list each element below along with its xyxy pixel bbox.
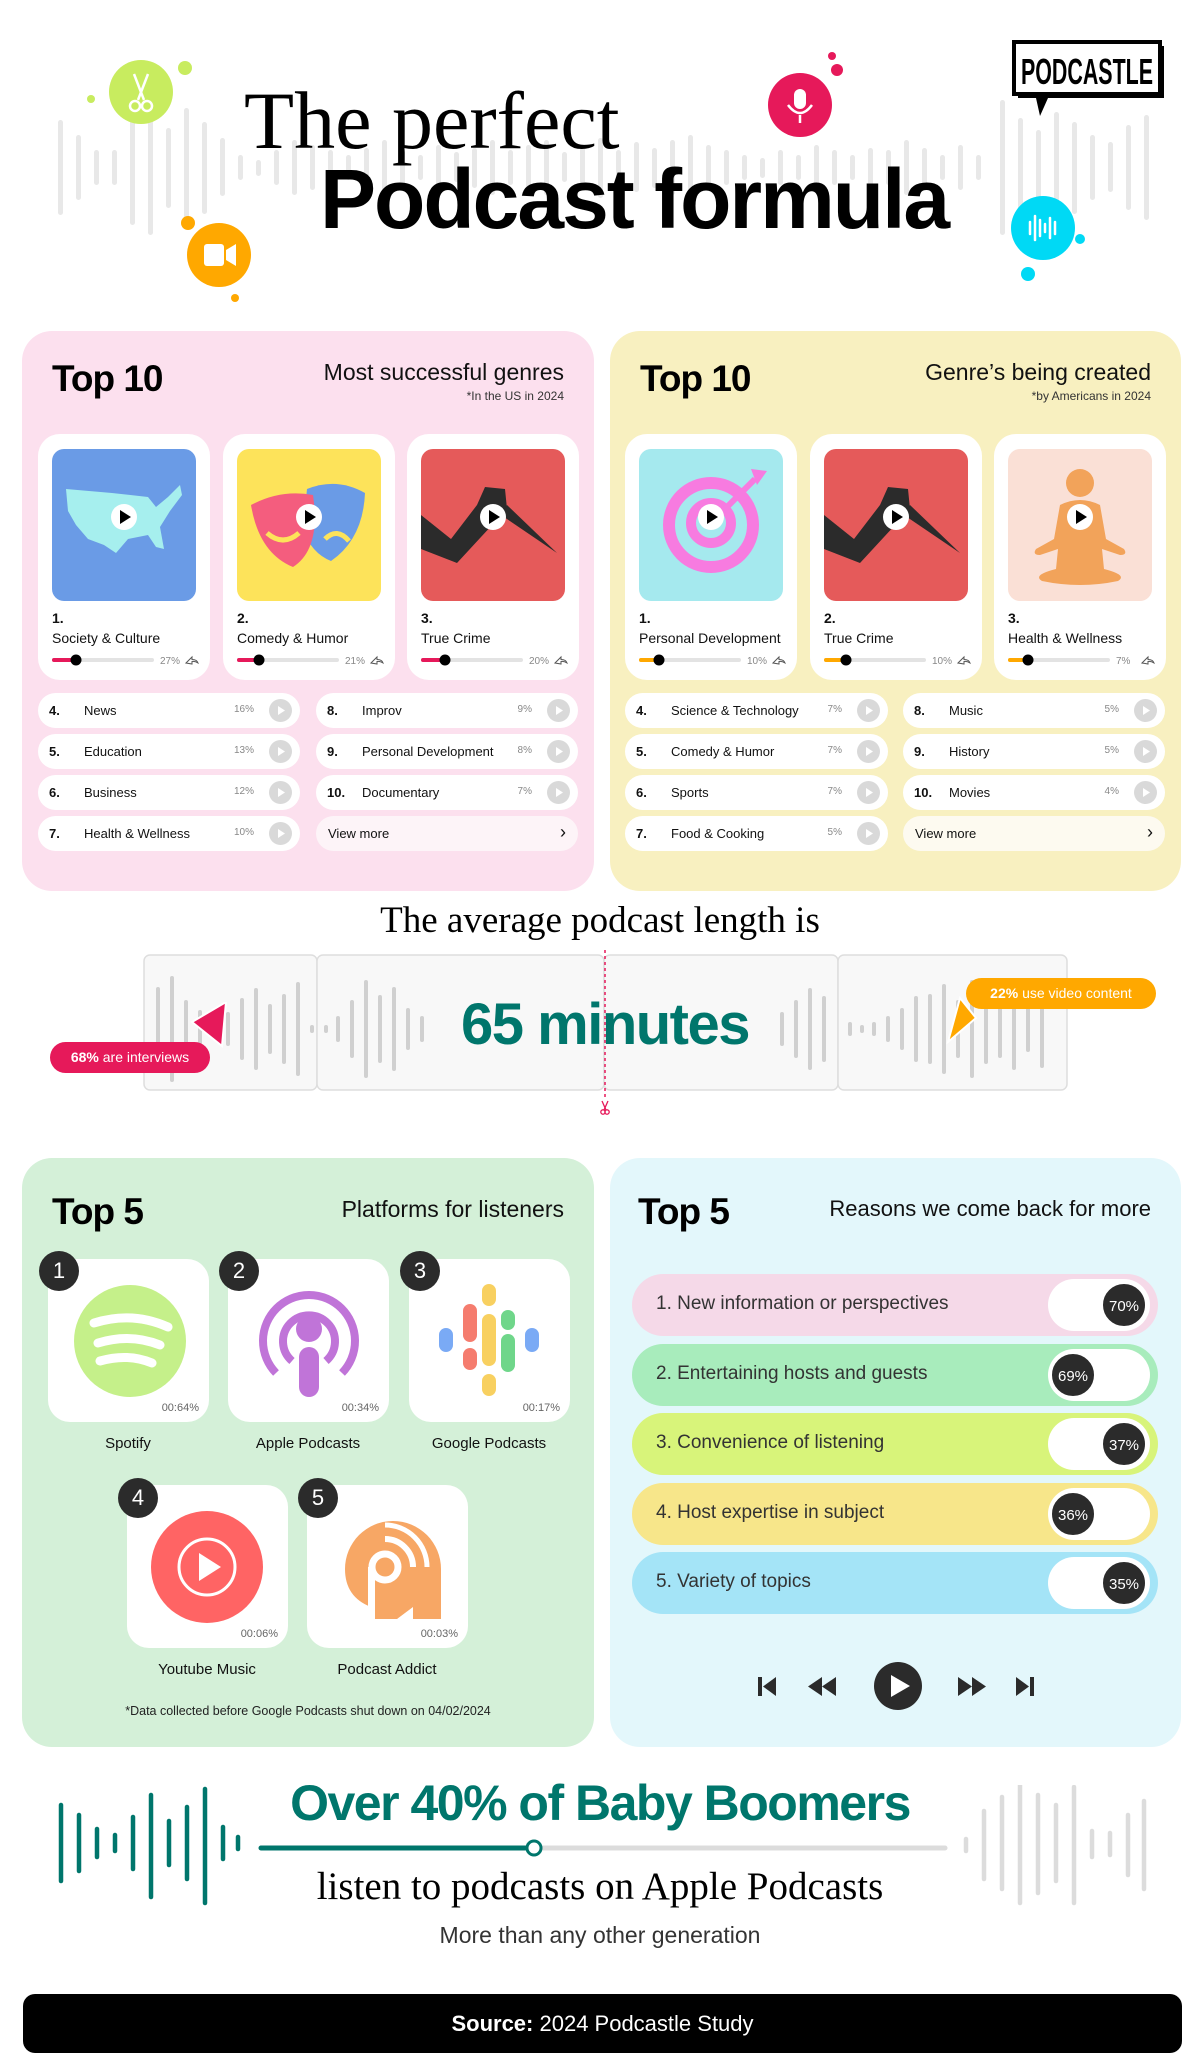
list: genres 4-10 (successful): 4. <box>49 703 60 718</box>
card: true crime (created): 2. <box>824 610 836 626</box>
list: genres 4-10 (successful): 5. <box>49 744 60 759</box>
list: genres 4-10 (successful): Personal Development <box>362 744 494 759</box>
list: genres 4-10 (successful): 12% <box>234 786 254 797</box>
card: personal development <box>625 434 797 680</box>
logo: PODCASTLE <box>1012 40 1164 116</box>
list: genres 4-10 (created): 7% <box>828 786 842 797</box>
bar: reason 5 <box>632 1552 1158 1614</box>
badge 2: 2 <box>233 1258 245 1283</box>
platform: Youtube Music <box>127 1485 288 1648</box>
chart: waveform timeline <box>143 950 1068 1115</box>
callout: 22% video: 22% use video content <box>990 985 1132 1001</box>
list: genres 4-10 (successful): 8. <box>327 703 338 718</box>
title: The perfect <box>244 75 620 166</box>
title: Podcast formula <box>320 152 948 246</box>
list: genres 4-10 (successful): 10. <box>327 785 345 800</box>
platform: Spotify <box>48 1259 209 1422</box>
list: genres 4-10 (successful): 7. <box>49 826 60 841</box>
heading: average podcast length: The average podcast length is <box>380 900 820 941</box>
list: genres 4-10 (successful): News <box>84 703 117 718</box>
card: comedy & humor <box>223 434 395 680</box>
list: genres 4-10 (successful): View more <box>328 826 389 841</box>
heading: Over 40% of Baby Boomers: Over 40% of Baby Boomers <box>290 1775 910 1831</box>
card: true crime: 3. <box>421 610 433 626</box>
badge 4: 4 <box>132 1485 144 1510</box>
bar: reason 2: 69% <box>1058 1368 1088 1385</box>
subtitle: Reasons we come back for more <box>829 1196 1151 1221</box>
bar: reason 1: 70% <box>1109 1298 1139 1315</box>
list: genres 4-10 (successful) <box>38 693 578 851</box>
card: true crime (created): True Crime <box>824 630 894 646</box>
callout: 22% video <box>950 978 1156 1039</box>
card: society & culture <box>38 434 210 680</box>
badge 5: 5 <box>312 1485 324 1510</box>
subtitle: Genre’s being created <box>925 359 1151 385</box>
heading: Top 5: Top 5 <box>52 1191 143 1232</box>
label: Youtube Music: Youtube Music <box>158 1661 256 1678</box>
list: genres 4-10 (created): Music <box>949 703 983 718</box>
icon: knife <box>824 449 968 601</box>
badge 3 <box>400 1251 440 1291</box>
bar: reason 5: 5. Variety of topics <box>656 1571 811 1592</box>
list: genres 4-10 (created): 9. <box>914 744 925 759</box>
list: genres 4-10 (successful): 7% <box>518 786 532 797</box>
footnote: *Data collected before Google Podcasts shut down on 04/02/2024 <box>125 1704 491 1718</box>
card: health & wellness <box>994 434 1166 680</box>
list: genres 4-10 (created): Comedy & Humor <box>671 744 774 759</box>
text: listen to podcasts on Apple Podcasts: listen to podcasts on Apple Podcasts <box>317 1865 883 1908</box>
list: genres 4-10 (created): 8. <box>914 703 925 718</box>
list: genres 4-10 (created): 5% <box>1105 704 1119 715</box>
icon: USA map <box>52 449 196 601</box>
icon: teal waveform <box>58 1786 240 1906</box>
list: genres 4-10 (created): Science & Technology <box>671 703 799 718</box>
platform: Google Podcasts <box>409 1259 570 1422</box>
icon: target <box>639 449 783 601</box>
list: genres 4-10 (successful): 8% <box>518 745 532 756</box>
heading: Top 5: Top 5 <box>638 1191 729 1232</box>
bar: reason 1 <box>632 1274 1158 1336</box>
platform: Podcast Addict: 00:03% <box>421 1628 458 1640</box>
icon: audio waveform bubble <box>1011 196 1085 281</box>
list: genres 4-10 (successful): 13% <box>234 745 254 756</box>
header waveform background <box>58 100 1149 235</box>
icon: apple podcasts <box>259 1291 359 1397</box>
label: Apple Podcasts: Apple Podcasts <box>256 1435 360 1452</box>
bar: reason 4: 4. Host expertise in subject <box>656 1502 884 1523</box>
platform: Google Podcasts: 00:17% <box>523 1402 560 1414</box>
icon: meditation <box>1008 449 1152 601</box>
list: genres 4-10 (created): 5% <box>1105 745 1119 756</box>
platform: Apple Podcasts <box>228 1259 389 1422</box>
card: health & wellness: 3. <box>1008 610 1020 626</box>
list: genres 4-10 (created): 4. <box>636 703 647 718</box>
list: genres 4-10 (created) <box>625 693 1165 851</box>
list: genres 4-10 (successful): Health & Wellness <box>84 826 190 841</box>
slider <box>258 1840 948 1856</box>
card: health & wellness: Health & Wellness <box>1008 630 1122 646</box>
label: Google Podcasts: Google Podcasts <box>432 1435 546 1452</box>
icon: youtube music <box>151 1511 263 1623</box>
list: genres 4-10 (created): History <box>949 744 989 759</box>
list: genres 4-10 (created): 4% <box>1105 786 1119 797</box>
bar: reason 5: 35% <box>1109 1576 1139 1593</box>
list: genres 4-10 (created): Movies <box>949 785 990 800</box>
icon: knife <box>421 449 565 601</box>
card: comedy & humor: 2. <box>237 610 249 626</box>
caption: *by Americans in 2024 <box>1032 389 1151 403</box>
list: genres 4-10 (created): 7% <box>828 704 842 715</box>
list: genres 4-10 (created): 7% <box>828 745 842 756</box>
callout: 68% interviews: 68% are interviews <box>71 1049 189 1065</box>
platform: Podcast Addict <box>307 1485 468 1648</box>
list: genres 4-10 (created): 5% <box>828 827 842 838</box>
bar: reason 2 <box>632 1344 1158 1406</box>
label: Podcast Addict: Podcast Addict <box>337 1661 437 1678</box>
list: genres 4-10 (created): View more <box>915 826 976 841</box>
list: genres 4-10 (successful): 10% <box>234 827 254 838</box>
list: genres 4-10 (successful): Documentary <box>362 785 439 800</box>
list: genres 4-10 (created): 7. <box>636 826 647 841</box>
list: genres 4-10 (created): 10. <box>914 785 932 800</box>
list: genres 4-10 (successful): 9% <box>518 704 532 715</box>
card: true crime: True Crime <box>421 630 490 646</box>
caption: *In the US in 2024 <box>467 389 564 403</box>
card: personal development: Personal Development <box>639 630 781 646</box>
icon: theatre masks <box>237 449 381 601</box>
footer: source: Source: 2024 Podcastle Study <box>451 2011 754 2036</box>
label: Spotify: Spotify <box>105 1435 151 1452</box>
list: genres 4-10 (created): Sports <box>671 785 709 800</box>
badge 5 <box>298 1478 338 1518</box>
icon: microphone bubble <box>768 52 843 137</box>
heading: Top 10: Top 10 <box>52 358 162 399</box>
badge 2 <box>219 1251 259 1291</box>
panel: most successful genres <box>22 331 594 891</box>
bar: reason 1: 1. New information or perspectives <box>656 1293 949 1314</box>
stat: 65 minutes: 65 minutes <box>461 992 749 1057</box>
card: comedy & humor: Comedy & Humor <box>237 630 348 646</box>
icon: spotify <box>74 1285 186 1397</box>
list: genres 4-10 (successful): › <box>560 822 566 842</box>
bar: reason 4: 36% <box>1058 1507 1088 1524</box>
title <box>244 75 951 246</box>
list: genres 4-10 (successful): 16% <box>234 704 254 715</box>
platform: Spotify: 00:64% <box>162 1402 199 1414</box>
badge 4 <box>118 1478 158 1518</box>
platform: Apple Podcasts: 00:34% <box>342 1402 379 1414</box>
heading: Top 10: Top 10 <box>640 358 750 399</box>
panel: platforms for listeners <box>22 1158 594 1747</box>
text: more than any other generation: More than any other generation <box>440 1922 760 1948</box>
list: genres 4-10 (created): 6. <box>636 785 647 800</box>
badge 3: 3 <box>414 1258 426 1283</box>
card: true crime (created) <box>810 434 982 680</box>
list: genres 4-10 (created): Food & Cooking <box>671 826 764 841</box>
card: true crime <box>407 434 579 680</box>
panel: reasons we come back <box>610 1158 1181 1747</box>
badge 1: 1 <box>53 1258 65 1283</box>
bar: reason 3 <box>632 1413 1158 1475</box>
icon: gray waveform <box>964 1785 1146 1906</box>
list: genres 4-10 (created): › <box>1147 822 1153 842</box>
panel: genres being created <box>610 331 1181 891</box>
card: society & culture: 1. <box>52 610 64 626</box>
footer: source <box>23 1994 1182 2053</box>
icon: scissors bubble <box>87 60 192 124</box>
list: genres 4-10 (successful): Education <box>84 744 142 759</box>
subtitle: Most successful genres <box>324 359 564 385</box>
list: genres 4-10 (successful): 6. <box>49 785 60 800</box>
subtitle: Platforms for listeners <box>342 1196 564 1222</box>
bar: reason 3: 37% <box>1109 1437 1139 1454</box>
bar: reason 4 <box>632 1483 1158 1545</box>
list: genres 4-10 (successful): Business <box>84 785 137 800</box>
list: genres 4-10 (created): 5. <box>636 744 647 759</box>
badge 1 <box>39 1251 79 1291</box>
bar: reason 3: 3. Convenience of listening <box>656 1432 884 1453</box>
icon: player controls <box>758 1662 1034 1710</box>
list: genres 4-10 (successful): 9. <box>327 744 338 759</box>
list: genres 4-10 (successful): Improv <box>362 703 402 718</box>
callout: 68% interviews <box>50 1004 225 1073</box>
bar: reason 2: 2. Entertaining hosts and guests <box>656 1363 927 1384</box>
icon: podcast addict <box>345 1521 441 1619</box>
platform: Youtube Music: 00:06% <box>241 1628 278 1640</box>
card: society & culture: Society & Culture <box>52 630 160 646</box>
icon: video camera bubble <box>181 216 251 302</box>
card: personal development: 1. <box>639 610 651 626</box>
icon: google podcasts <box>439 1284 539 1396</box>
